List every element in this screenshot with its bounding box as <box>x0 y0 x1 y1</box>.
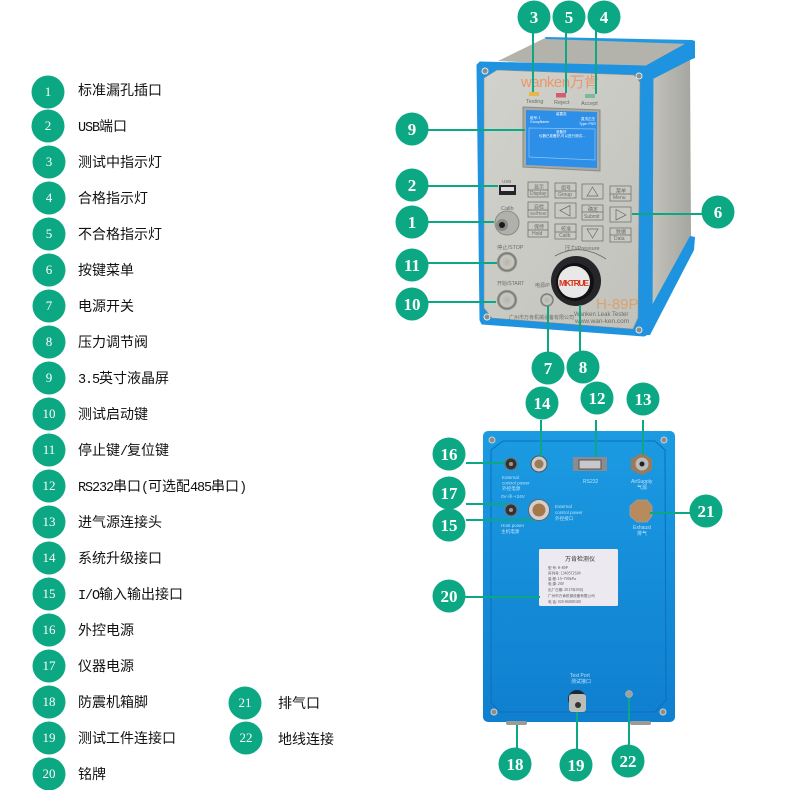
keypad labels: Submit <box>584 214 600 220</box>
host power jack: 主机电源 <box>501 528 520 535</box>
front panel frame <box>477 62 653 336</box>
legend list <box>32 76 334 790</box>
model label: www.wan-ken.com <box>574 318 629 325</box>
external power jack: 外控电源 <box>502 485 521 492</box>
brand logo: wanken万肯 <box>520 74 599 91</box>
callout 13: 13 <box>634 390 652 409</box>
legend item 16: 16 <box>42 622 56 637</box>
callout 7 <box>532 352 564 384</box>
keypad labels <box>530 184 626 242</box>
nameplate <box>539 549 618 606</box>
pressure regulator knob: 压力/Pressure <box>565 244 600 252</box>
legend item 9: 9 <box>46 370 52 385</box>
legend item 7 <box>32 290 134 322</box>
legend item 5 <box>32 218 162 250</box>
callout 4 <box>588 0 620 34</box>
cabinet top face <box>498 38 692 68</box>
callout 6: 6 <box>714 203 722 222</box>
callout 9: 9 <box>408 120 416 139</box>
RS232 connector <box>573 457 607 485</box>
legend item 10: 测试启动键 <box>78 404 148 424</box>
callout 8 <box>566 350 600 384</box>
external power jack: External <box>502 475 519 480</box>
keypad labels: 组号 <box>561 184 571 192</box>
start button <box>496 280 524 311</box>
callout 22: 22 <box>620 752 636 771</box>
nameplate: 量 程: 15~700kPa <box>548 576 576 582</box>
upgrade port <box>531 456 547 472</box>
model label <box>509 296 639 325</box>
legend item 3: 3 <box>46 154 52 169</box>
legend item 2 <box>32 110 127 142</box>
test port <box>568 673 591 712</box>
legend item 2: 2 <box>45 118 51 133</box>
external power jack: control power <box>502 480 530 486</box>
callout 5: 5 <box>565 8 573 27</box>
legend item 5: 5 <box>46 226 52 241</box>
pressure regulator knob: MKTRUE <box>559 278 589 288</box>
side rails <box>645 41 695 335</box>
legend item 20: 20 <box>42 766 56 781</box>
legend item 12: 12 <box>42 478 56 493</box>
nameplate: 序列号: 1340572S04 <box>548 570 581 576</box>
callout 19 <box>560 748 592 782</box>
corner screws <box>482 68 642 333</box>
model label: 广州市万肯机械设备有限公司 <box>509 314 574 321</box>
legend item 6: 6 <box>46 262 53 277</box>
keypad labels: 显示 <box>534 184 544 190</box>
legend item 10 <box>32 398 148 430</box>
callout 11: 11 <box>404 256 420 275</box>
exhaust connector: 排气 <box>637 530 647 537</box>
legend item 3: 测试中指示灯 <box>78 152 162 172</box>
callout 19: 19 <box>568 756 584 775</box>
LCD screen: 装置态 <box>556 111 567 117</box>
legend item 11: 停止键/复位键 <box>78 440 169 460</box>
host power jack <box>501 494 526 535</box>
callout 1 <box>396 206 428 238</box>
legend item 8 <box>32 326 148 358</box>
legend item 16: 外控电源 <box>78 620 134 640</box>
keypad labels: Calib <box>559 233 571 239</box>
legend item 13: 进气源连接头 <box>78 512 162 532</box>
calib port <box>495 206 519 235</box>
exhaust connector: Exhaust <box>633 525 652 531</box>
legend item 7: 7 <box>46 298 53 313</box>
callout 18 <box>498 748 532 780</box>
legend item 4: 4 <box>46 190 53 205</box>
nameplate: 电 话: 020-86888180 <box>548 599 581 605</box>
legend item 6 <box>32 254 134 286</box>
legend item 8: 压力调节阀 <box>78 332 148 352</box>
indicator lights <box>526 92 598 107</box>
callout 15: 15 <box>440 516 458 535</box>
legend item 10: 10 <box>42 406 56 421</box>
callout 14 <box>526 386 558 420</box>
keypad labels: SelfTest <box>530 211 547 216</box>
I/O port: 外控接口 <box>555 515 574 522</box>
callout numbers <box>396 0 734 782</box>
callout 20 <box>432 580 466 612</box>
test port: 测试接口 <box>571 678 591 685</box>
legend item 1: 1 <box>45 84 51 99</box>
keypad <box>528 182 631 242</box>
callout 1: 1 <box>408 213 416 232</box>
callout 17 <box>432 476 466 510</box>
legend item 17: 仪器电源 <box>78 656 134 676</box>
keypad labels: Data <box>614 236 625 242</box>
legend item 21 <box>228 686 320 720</box>
LCD screen: GroupName <box>530 120 549 124</box>
test port: Test Port <box>570 673 590 679</box>
stop button: 停止/STOP <box>497 243 524 251</box>
nameplate: 电 源: 24V <box>548 581 565 587</box>
legend item 19 <box>32 722 176 754</box>
legend item 16 <box>32 614 134 646</box>
legend item 18: 防震机箱脚 <box>78 692 148 712</box>
callout 4: 4 <box>600 8 609 27</box>
callout 18: 18 <box>506 755 524 774</box>
callout 5 <box>552 0 586 34</box>
LCD screen: 仪器已准备好,可以进行测试... <box>539 133 585 139</box>
calib port: Calib <box>501 206 514 212</box>
indicator lights: Accept <box>581 101 598 107</box>
keypad labels: 菜单 <box>616 188 626 194</box>
model label: Wanken Leak Tester <box>574 312 628 318</box>
legend item 13 <box>32 506 162 538</box>
USB port <box>499 179 516 195</box>
callout 2 <box>396 168 428 202</box>
host power jack: Host power <box>501 523 525 528</box>
nameplate: 型 号: H-89P <box>548 565 569 571</box>
ground screw <box>626 690 632 698</box>
callout 16: 16 <box>440 445 458 464</box>
pressure regulator knob <box>551 244 606 306</box>
legend item 6: 按键菜单 <box>78 260 134 280</box>
legend item 4: 合格指示灯 <box>78 188 148 208</box>
callout 10: 10 <box>404 295 420 314</box>
legend item 5: 不合格指示灯 <box>78 224 162 244</box>
callout 7: 7 <box>544 359 553 378</box>
callout 3 <box>518 0 550 34</box>
legend item 20: 铭牌 <box>78 764 106 784</box>
callout 21: 21 <box>698 502 714 521</box>
legend item 21: 21 <box>238 695 252 710</box>
legend item 15 <box>32 578 183 610</box>
legend item 18 <box>32 686 148 718</box>
keypad labels: Group <box>558 192 572 198</box>
nameplate: 广州市万肯机械设备有限公司 <box>548 593 595 599</box>
callout 13 <box>626 382 660 416</box>
legend item 12: RS232串口(可选配485串口) <box>78 476 246 496</box>
legend item 4 <box>32 182 148 214</box>
power switch: 电源/P <box>535 282 550 289</box>
back view of device <box>483 431 675 725</box>
LCD screen <box>523 107 600 171</box>
legend item 2: USB端口 <box>78 116 127 136</box>
keypad labels: 数据 <box>616 228 626 236</box>
callout 3: 3 <box>530 8 538 27</box>
legend item 14: 14 <box>42 550 56 565</box>
legend item 9: 3.5英寸液晶屏 <box>78 368 169 388</box>
legend item 19: 19 <box>42 730 56 745</box>
nameplate: 万肯检测仪 <box>565 554 595 563</box>
leader lines <box>428 30 705 750</box>
legend item 17 <box>32 650 134 682</box>
legend item 1: 标准漏孔插口 <box>78 80 162 100</box>
callout 12 <box>580 382 614 414</box>
keypad labels: Display <box>530 191 547 197</box>
legend item 22: 22 <box>240 730 252 745</box>
USB port: USB <box>502 179 511 184</box>
start button: 开始/START <box>497 280 524 287</box>
I/O port: External <box>555 504 572 509</box>
indicator lights: Testing <box>526 99 543 105</box>
keypad labels: 保持 <box>534 224 544 230</box>
keypad labels: 校准 <box>561 226 571 232</box>
nameplate: 出厂日期: 2017年09月 <box>548 587 583 593</box>
keypad labels: 确定 <box>588 206 598 213</box>
stop button <box>496 243 524 273</box>
LCD screen: 准备好 <box>556 129 567 135</box>
legend item 18: 18 <box>42 694 56 709</box>
legend item 1 <box>32 76 162 108</box>
back panel body <box>483 431 675 722</box>
I/O port: control power <box>555 510 583 515</box>
legend item 13: 13 <box>42 514 56 529</box>
air supply connector: 气源 <box>637 484 647 491</box>
legend item 7: 电源开关 <box>78 296 134 316</box>
air supply connector <box>631 453 653 491</box>
cabinet side face <box>650 58 691 310</box>
exhaust connector <box>630 500 652 537</box>
front view of device <box>477 37 695 336</box>
legend item 12 <box>32 470 246 502</box>
callout 20: 20 <box>440 587 458 606</box>
callout 22 <box>612 744 644 778</box>
legend item 19: 测试工件连接口 <box>78 728 176 748</box>
indicator lights: Reject <box>554 100 570 106</box>
callout 15 <box>432 508 466 542</box>
LCD screen: 直流正压 <box>581 116 595 122</box>
callout 17: 17 <box>440 484 458 503</box>
air supply connector: AirSupply <box>631 479 653 485</box>
LCD screen: Type: PSR <box>579 122 596 126</box>
callout 11 <box>396 248 428 282</box>
host power jack: 0V-⊕-+24V <box>501 494 526 499</box>
callout 2: 2 <box>408 176 416 195</box>
legend item 11 <box>32 434 169 466</box>
callout 21 <box>690 494 722 528</box>
feet <box>506 721 527 725</box>
callout 12: 12 <box>588 389 606 408</box>
callout 8: 8 <box>579 358 587 377</box>
legend item 22 <box>230 722 334 754</box>
external power jack <box>502 458 530 492</box>
keypad labels: 自检 <box>534 204 544 210</box>
legend item 15: 15 <box>42 586 56 601</box>
callout 6 <box>702 196 734 228</box>
legend item 21: 排气口 <box>278 693 320 713</box>
legend item 17: 17 <box>42 658 56 673</box>
legend item 8: 8 <box>46 334 52 349</box>
legend item 15: I/O输入输出接口 <box>78 584 183 604</box>
legend item 22: 地线连接 <box>278 729 334 749</box>
power switch <box>535 282 554 308</box>
callout 10 <box>396 288 428 320</box>
legend item 11: 11 <box>43 442 55 457</box>
legend item 14 <box>32 542 162 574</box>
legend item 20 <box>32 758 106 790</box>
I/O port <box>528 500 583 522</box>
model label: H-89P <box>596 296 639 313</box>
keypad labels: Hold <box>532 231 543 237</box>
callout 14: 14 <box>534 394 551 413</box>
keypad labels: Menu <box>613 195 626 201</box>
corner screws <box>489 437 667 715</box>
legend item 14: 系统升级接口 <box>78 548 162 568</box>
RS232 connector: RS232 <box>583 479 599 485</box>
callout 16 <box>432 438 466 470</box>
LCD screen: 组号: 1 <box>530 115 541 121</box>
legend item 9 <box>32 362 169 394</box>
callout 9 <box>396 112 428 146</box>
legend item 3 <box>32 146 162 178</box>
